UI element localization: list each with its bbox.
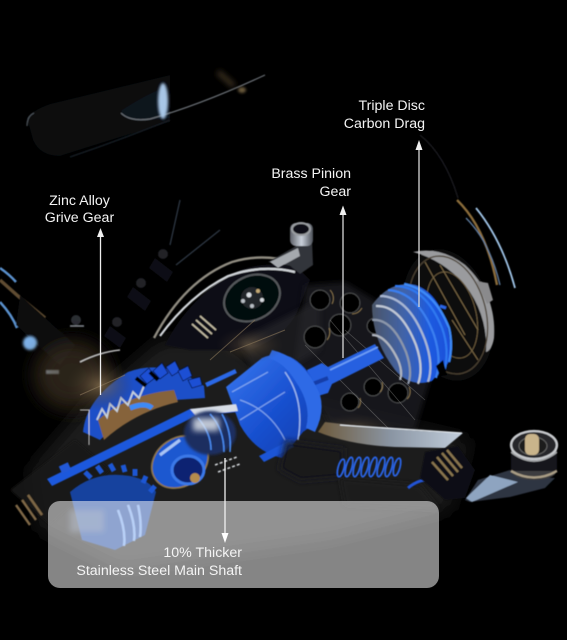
- label: brass pinion gear: Gear: [319, 184, 351, 200]
- label: brass pinion gear: Brass Pinion: [271, 166, 351, 182]
- crank lever with socket: [268, 223, 313, 274]
- crown drive gear: [80, 361, 205, 445]
- arrow: stainless steel main shaft: [222, 458, 228, 543]
- lower blue bevel gear: [70, 464, 156, 550]
- blue coil spring: [336, 457, 438, 490]
- perforated transparent side plate: [240, 282, 430, 435]
- label: stainless steel main shaft: 10% Thicker: [163, 545, 242, 561]
- swept arc on the right: [420, 135, 515, 288]
- main blue gear housing: [206, 350, 322, 462]
- reel handle silhouette at top left: [27, 72, 265, 157]
- upper bracket with bearing plate: [154, 258, 310, 350]
- label: triple disc carbon drag: Carbon Drag: [344, 116, 425, 132]
- label: stainless steel main shaft: Stainless Steel Main Shaft: [76, 563, 242, 579]
- arrow: brass pinion gear: [340, 206, 346, 358]
- dark machinery wash behind the parts: [30, 340, 470, 570]
- arrow: triple disc carbon drag: [416, 140, 422, 307]
- lower arm and bail blade: [278, 422, 463, 510]
- label: zinc alloy drive gear: Grive Gear: [45, 210, 114, 226]
- blue drag spool with rear disc: [372, 239, 507, 391]
- left side reel frame: [0, 200, 220, 525]
- threaded screw and housing: [420, 446, 475, 500]
- warm motion blur highlights: [66, 320, 395, 442]
- label: triple disc carbon drag: Triple Disc: [359, 98, 425, 114]
- diagonal blue rocker bar: [47, 404, 238, 486]
- label: zinc alloy drive gear: Zinc Alloy: [49, 193, 111, 209]
- translucent caption panel: [48, 501, 439, 588]
- pinion shaft: [307, 344, 384, 396]
- pinion gear cluster: [142, 411, 240, 499]
- arrow: zinc alloy drive gear: [97, 228, 104, 395]
- handle knob with brass cap: [465, 431, 557, 502]
